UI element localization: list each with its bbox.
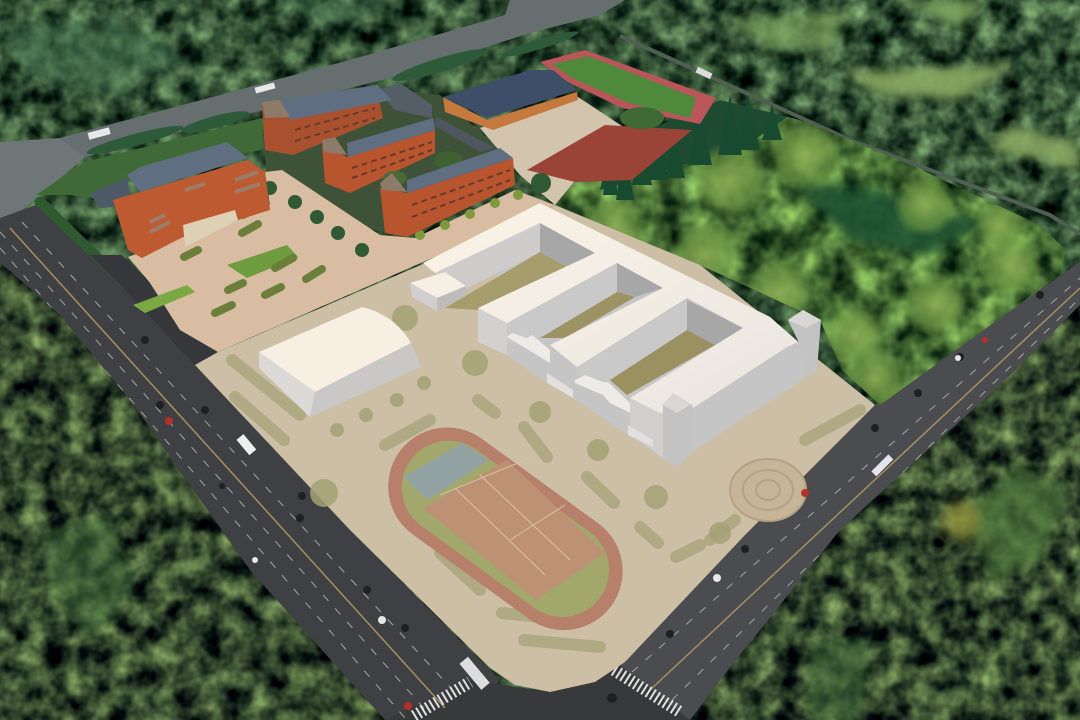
forest: bottom left [0, 260, 390, 720]
brick building: middle block [322, 117, 495, 193]
hedge along left road [40, 202, 125, 285]
brick building: south block [380, 148, 515, 237]
site shrubs [232, 360, 860, 647]
plaza lawns [133, 173, 551, 313]
massing model: small annex [410, 272, 466, 311]
verge row of trees [85, 28, 580, 159]
left road markings [0, 222, 460, 718]
bottom intersection [385, 665, 690, 720]
parking strip [90, 255, 220, 365]
site tree dots [310, 305, 731, 544]
track and field at top [540, 50, 716, 124]
forest: bottom right [690, 300, 1080, 720]
front plaza [128, 170, 555, 352]
top road [60, 0, 625, 157]
fan-shaped paving [730, 459, 806, 521]
crossings [414, 670, 680, 716]
campus grass verge [36, 118, 290, 200]
grove near courts [620, 107, 664, 129]
right main road [610, 262, 1080, 720]
right road markings [632, 278, 1080, 700]
massing model: white sports hall [259, 307, 421, 417]
conifer row [603, 95, 782, 200]
massing model: main building [423, 203, 821, 467]
upper plaza [480, 97, 625, 205]
sports ground [365, 404, 646, 654]
brick building: front hall [90, 142, 270, 258]
red courts [527, 125, 692, 182]
top left clearing [0, 0, 400, 95]
top right meadows [725, 0, 1080, 170]
campus dark ground [262, 90, 510, 240]
gymnasium [443, 70, 578, 130]
brick building: north block [262, 83, 432, 155]
forest: conifers and broadleaf behind site [550, 95, 1070, 412]
thin road at top right [620, 36, 1080, 234]
left main road [0, 205, 500, 720]
vehicles [88, 67, 1044, 710]
road junction at left [0, 138, 85, 220]
proposed site ground [195, 205, 875, 692]
